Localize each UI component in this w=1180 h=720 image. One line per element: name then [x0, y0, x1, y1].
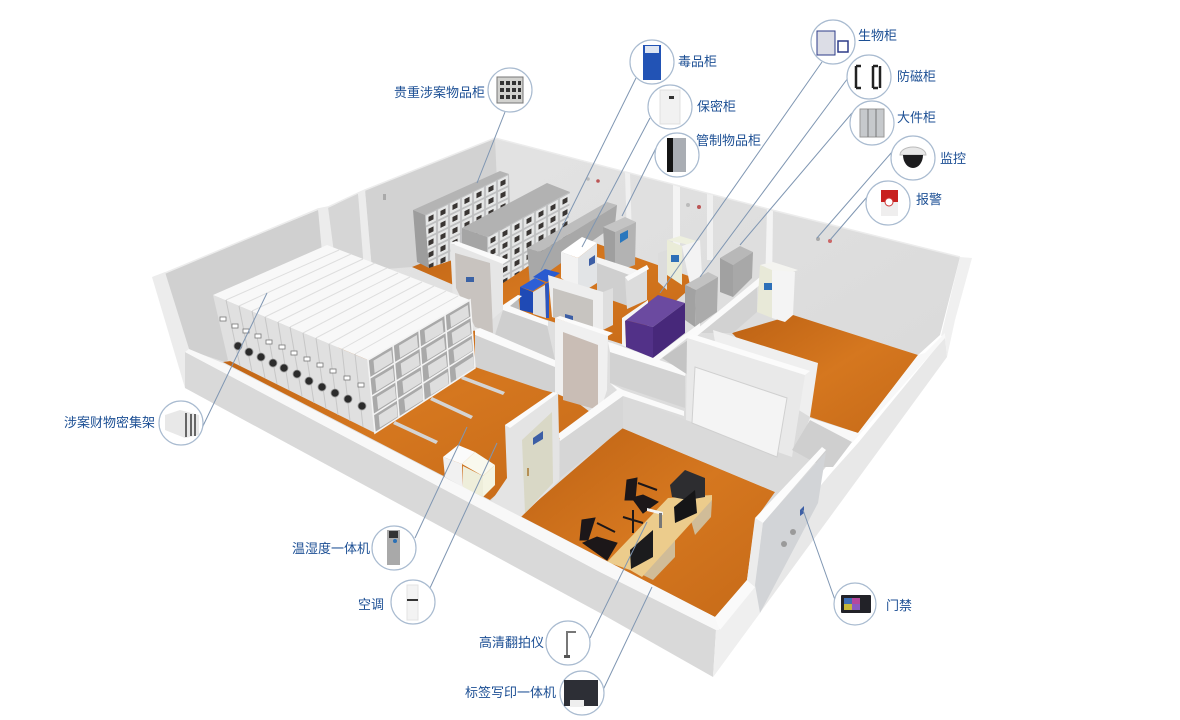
callout: narcotics cabinet [630, 40, 717, 84]
cabinet: valuables lockers [413, 171, 511, 268]
callout: document scanner [479, 621, 590, 665]
leader lines [202, 62, 892, 690]
callout: air conditioner: 空调 [358, 597, 384, 612]
cabinet: controlled items [603, 217, 636, 272]
office chair 2 [580, 518, 617, 560]
front outer wall [152, 272, 720, 677]
callout: document scanner: 高清翻拍仪 [479, 635, 544, 650]
office back wall [610, 383, 800, 492]
callout: confidential cabinet: 保密柜 [697, 99, 736, 114]
middle room wall [475, 295, 557, 393]
office server [670, 470, 705, 500]
callout: surveillance camera: 监控 [940, 151, 966, 166]
callout: temperature humidity unit [292, 526, 416, 570]
cabinet: purple [622, 295, 700, 361]
wall: sign board rear [713, 330, 818, 417]
office monitor front [630, 530, 653, 569]
callout: alarm: 报警 [916, 192, 942, 207]
cabinet: confidential [561, 237, 597, 295]
callout: confidential cabinet [648, 85, 736, 129]
callout: surveillance camera [891, 136, 966, 180]
cabinet: gray block [527, 202, 617, 285]
right room wood floor [732, 315, 918, 433]
right outer wall [713, 257, 972, 677]
cabinet: right room humidity units [757, 262, 798, 322]
vault door: office [747, 447, 826, 613]
overhead scanner [647, 508, 663, 528]
cabinet: biological units [658, 236, 702, 290]
callout: label printer [465, 671, 604, 715]
outer walls and interior shell [165, 138, 960, 620]
mobile rack [213, 245, 475, 433]
cabinet: narcotics blue [508, 269, 560, 318]
callout: valuables cabinet [394, 68, 532, 112]
office monitor rear [674, 490, 697, 523]
cabinet: lockers second row [462, 183, 570, 295]
callout: mobile rack [64, 401, 203, 445]
callout: temperature humidity unit: 温湿度一体机 [292, 541, 370, 556]
rear wood floor [412, 220, 700, 345]
callout: controlled items cabinet [655, 133, 761, 177]
office wood floor [520, 428, 775, 617]
right room partition [686, 277, 766, 338]
callout: controlled items cabinet: 管制物品柜 [696, 133, 761, 148]
callout: large items cabinet: 大件柜 [897, 110, 936, 125]
callout: biological cabinet: 生物柜 [858, 28, 897, 43]
wall sensors [383, 177, 832, 243]
cabinet: large items [685, 272, 718, 327]
callout: mobile rack: 涉案财物密集架 [64, 415, 155, 430]
packaged boxes [443, 445, 495, 497]
callout: biological cabinet [811, 20, 897, 64]
callout: air conditioner [358, 580, 435, 624]
callout: access control: 门禁 [886, 598, 912, 613]
callout: anti-magnetic cabinet [847, 55, 936, 99]
office chair 1 [623, 478, 658, 533]
door wall: centre door [555, 316, 613, 412]
cabinet: gray rear [720, 246, 753, 297]
callout: label printer: 标签写印一体机 [465, 685, 556, 700]
callout: access control [834, 583, 912, 625]
callout: alarm [866, 181, 942, 225]
wall: whiteboard front [686, 334, 810, 457]
safe door wall 2 [548, 275, 613, 332]
safe door wall 1 [450, 241, 509, 333]
storage room wood floor [223, 330, 590, 500]
callout: large items cabinet [850, 101, 936, 145]
floor rails [393, 376, 505, 444]
office desk [607, 495, 712, 580]
office left wall [558, 390, 623, 478]
door wall: office door [490, 392, 559, 518]
wall: rear partition [597, 257, 649, 309]
callout: anti-magnetic cabinet: 防磁柜 [897, 69, 936, 84]
callout: narcotics cabinet: 毒品柜 [678, 54, 717, 69]
callout: valuables cabinet: 贵重涉案物品柜 [394, 85, 485, 100]
corridor wall [608, 340, 688, 408]
